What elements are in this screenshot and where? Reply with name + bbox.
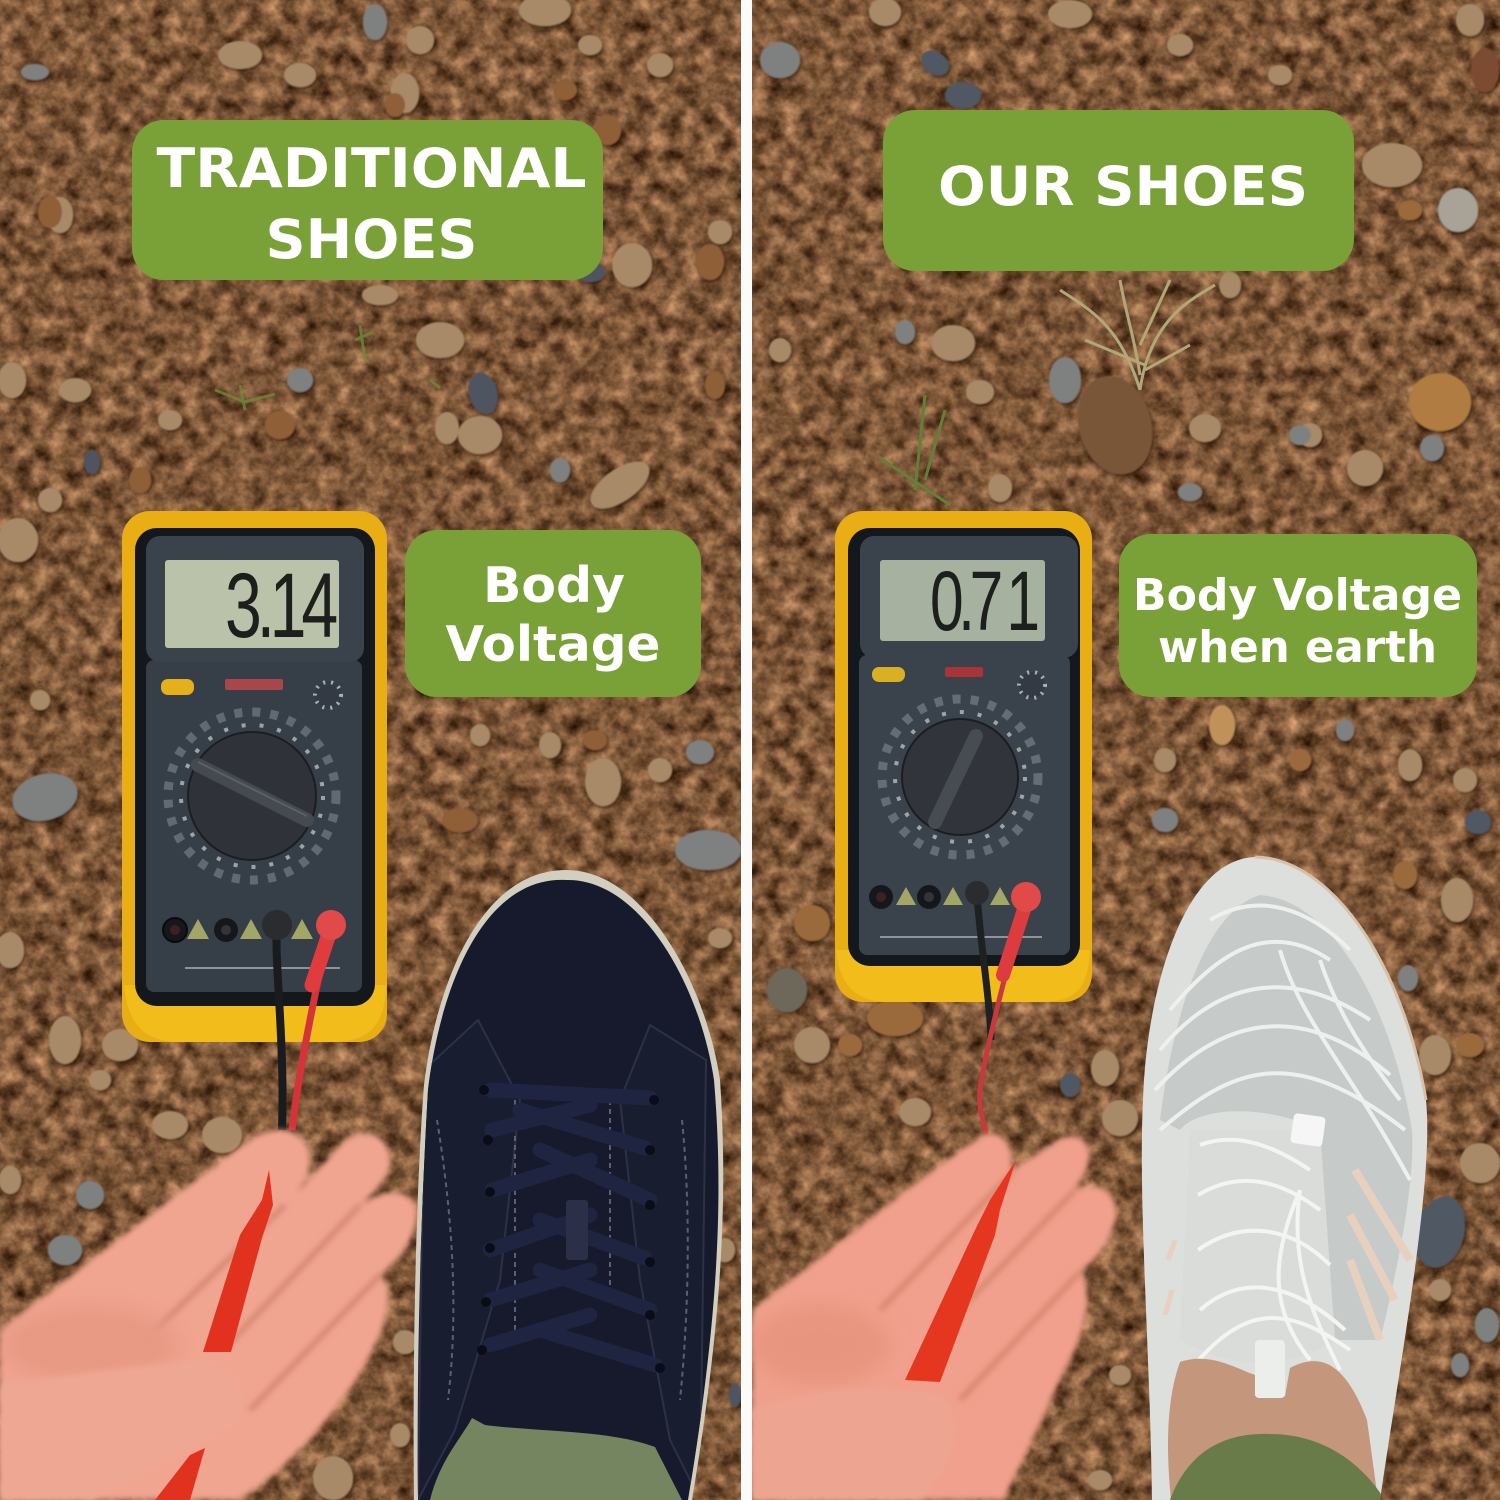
input jacks and warning triangles <box>163 918 340 968</box>
LCD reading: 0.71 <box>930 554 1040 648</box>
multimeter: reading 0.71 <box>835 511 1092 1135</box>
label: body voltage: Body <box>483 557 625 614</box>
label: traditional shoes: TRADITIONAL <box>156 137 586 200</box>
label: body voltage when earth: when earth <box>1158 622 1437 673</box>
sneaker: white mesh <box>1142 857 1427 1500</box>
grass tufts <box>880 280 1215 505</box>
label: our shoes: OUR SHOES <box>938 155 1308 218</box>
elastic toggle <box>1290 1113 1326 1147</box>
label: body voltage when earth <box>1119 534 1477 697</box>
label: traditional shoes <box>132 120 603 280</box>
dial scale <box>168 712 336 880</box>
LCD reading: 3.14 <box>225 553 338 657</box>
palm shade <box>0 1305 180 1385</box>
red probe <box>905 1160 1016 1382</box>
hand silhouette <box>752 1134 1116 1500</box>
panel: our shoes ground photo <box>750 0 1500 1500</box>
shoe quarter panels <box>418 1020 520 1500</box>
hand holding probe <box>750 1134 1116 1500</box>
stitching <box>437 1100 688 1400</box>
label: our shoes <box>883 110 1354 271</box>
meter lead wires <box>276 925 283 1130</box>
peach side stripes <box>1165 1170 1410 1340</box>
LCD display <box>880 560 1045 641</box>
yellow button <box>872 667 905 682</box>
yellow casing <box>835 511 1092 1002</box>
multimeter: reading 3.14 <box>122 511 387 1130</box>
finger creases <box>880 1172 1080 1400</box>
upper stripes <box>1155 906 1410 1180</box>
small rotary indicator <box>1019 672 1045 698</box>
laces <box>490 1090 655 1365</box>
ground stones <box>0 0 741 1500</box>
ground stones <box>760 0 1500 1490</box>
label: body voltage: Voltage <box>446 616 660 673</box>
trouser leg <box>1170 1434 1385 1500</box>
laces <box>1190 1140 1350 1370</box>
finger creases <box>150 1205 380 1410</box>
sneaker: dark navy <box>414 870 723 1500</box>
input jacks and warning triangles <box>869 885 1042 937</box>
rotary dial <box>188 732 316 860</box>
dark body <box>135 528 375 1006</box>
label: body voltage <box>405 530 701 697</box>
yellow button <box>161 679 194 695</box>
grass tufts <box>215 325 440 410</box>
lace shadows and eyelets <box>477 1085 665 1373</box>
trouser leg <box>430 1418 682 1500</box>
soil background <box>752 0 1500 1500</box>
label: traditional shoes: SHOES <box>266 208 478 271</box>
LCD display <box>165 560 339 648</box>
panel: traditional shoes ground photo <box>0 0 741 1500</box>
soil background <box>0 0 741 1500</box>
palm shade <box>750 1305 890 1385</box>
rotary dial <box>902 719 1018 835</box>
brand badge <box>945 667 983 677</box>
dial scale <box>882 699 1038 855</box>
label: body voltage when earth: Body Voltage <box>1133 570 1462 621</box>
hand silhouette <box>0 1130 417 1500</box>
small rotary indicator <box>315 682 341 708</box>
lace panel <box>1180 1130 1335 1363</box>
mesh panel <box>1160 895 1412 1340</box>
heel pull tab <box>1255 1340 1285 1398</box>
dark body <box>848 528 1080 966</box>
center white divider <box>741 0 752 1500</box>
brand badge <box>225 679 283 690</box>
ankle skin <box>1168 1359 1378 1500</box>
meter lead wires <box>977 895 991 1040</box>
red probe <box>203 1170 273 1352</box>
yellow casing <box>122 511 387 1042</box>
hand holding probe <box>0 1130 417 1500</box>
thumb <box>0 1362 241 1500</box>
thumb <box>752 1389 955 1500</box>
